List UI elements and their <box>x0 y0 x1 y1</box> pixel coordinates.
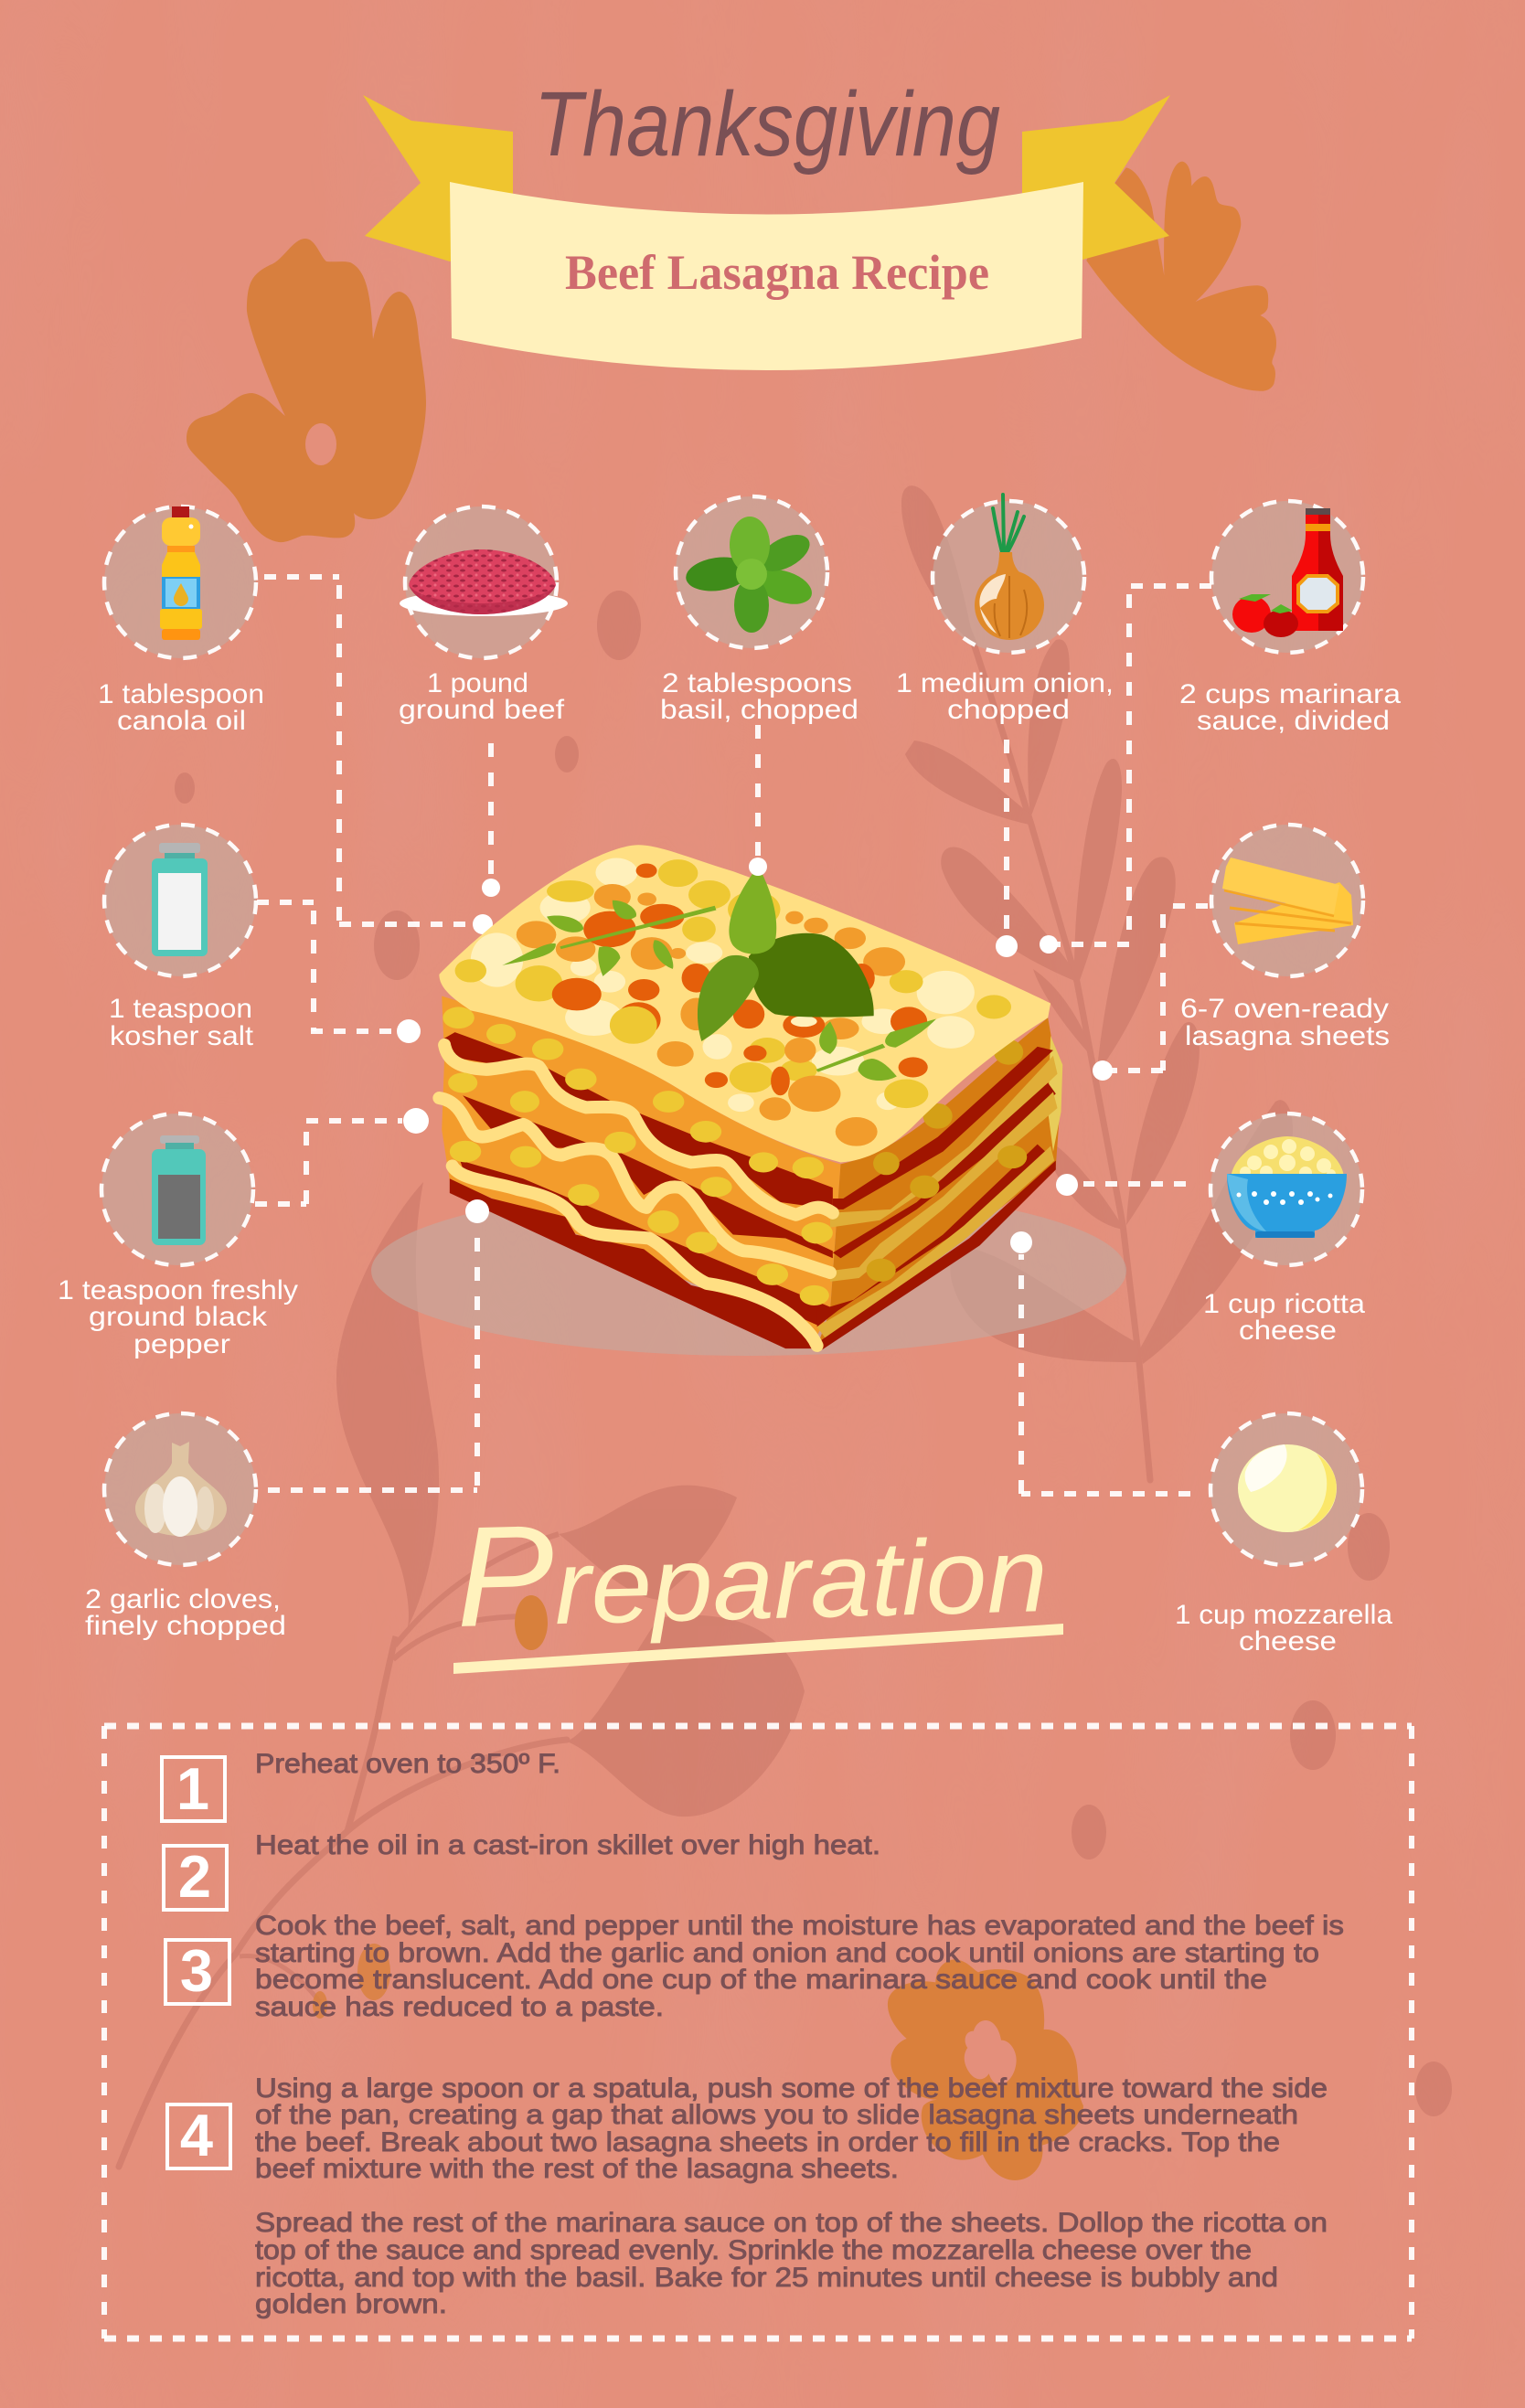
step 3 text: starting to brown. Add the garlic and onion and cook until onions are starting to <box>255 1938 1319 1968</box>
label: mozzarella <box>1175 1600 1392 1657</box>
ingredient: ricotta cheese <box>1210 1113 1362 1265</box>
label: ricotta <box>1203 1289 1365 1346</box>
label: black pepper: 1 teaspoon freshly <box>58 1275 298 1305</box>
right face <box>817 1018 1061 1347</box>
panel: preparation steps <box>104 1726 1412 2339</box>
step 4 number <box>167 2102 230 2168</box>
connector: onion <box>996 740 1018 957</box>
label: basil <box>660 668 858 725</box>
sauce bands <box>439 1032 1058 1349</box>
label: canola oil: 1 tablespoon <box>98 679 264 709</box>
pale right edge <box>1048 1036 1062 1152</box>
basil garnish <box>749 933 874 1018</box>
ingredient: basil <box>676 496 827 648</box>
ingredient: black pepper <box>101 1113 253 1265</box>
label: ricotta: cheese <box>1239 1316 1337 1346</box>
label: basil: 2 tablespoons <box>662 668 852 698</box>
step 4 text: golden brown. <box>255 2289 447 2319</box>
subtitle: Beef Lasagna Recipe: Beef Lasagna Recipe <box>565 245 989 300</box>
step 3 text: Cook the beef, salt, and pepper until the moisture has evaporated and the beef is <box>255 1911 1344 1941</box>
label: kosher salt <box>109 994 254 1051</box>
step 3 text: sauce has reduced to a paste. <box>255 1992 664 2022</box>
label: lasagna sheets: lasagna sheets <box>1185 1021 1390 1051</box>
orange dots <box>313 1595 548 2019</box>
herbs <box>502 900 936 1081</box>
step 3 number: 3 <box>180 1937 213 2004</box>
step 4 text: Using a large spoon or a spatula, push some of the beef mixture toward the side <box>255 2073 1328 2104</box>
connector: ground beef <box>482 743 500 897</box>
step 4 text: the beef. Break about two lasagna sheets in order to fill in the cracks. Top the <box>255 2127 1280 2158</box>
label: garlic: 2 garlic cloves, <box>85 1584 281 1614</box>
connector: marinara <box>1040 586 1211 954</box>
ingredient: kosher salt <box>104 825 256 976</box>
step 4 text: Spread the rest of the marinara sauce on top of the sheets. Dollop the ricotta on <box>255 2208 1328 2238</box>
step 4 text: of the pan, creating a gap that allows you to slide lasagna sheets underneath <box>255 2100 1298 2130</box>
ingredient: canola oil <box>104 506 256 658</box>
step 3 text <box>255 1911 1344 2022</box>
step 4 text <box>255 2073 1328 2319</box>
connector: mozzarella <box>1010 1231 1190 1494</box>
connector dots over lasagna <box>465 858 1078 1223</box>
label: basil: basil, chopped <box>660 695 858 725</box>
heading: Preparation: Preparation <box>453 1483 1050 1657</box>
pasta waves <box>439 1045 833 1346</box>
background plant: right <box>901 485 1293 1480</box>
step 2 number: 2 <box>178 1843 211 1910</box>
label: black pepper <box>58 1275 298 1359</box>
label: kosher salt: 1 teaspoon <box>109 994 252 1024</box>
ingredient: ground beef <box>400 506 568 658</box>
label: lasagna sheets: 6-7 oven-ready <box>1180 994 1389 1024</box>
connector: ricotta <box>1083 1181 1186 1187</box>
label: ricotta: 1 cup ricotta <box>1203 1289 1365 1319</box>
label: marinara sauce: 2 cups marinara <box>1179 679 1401 709</box>
label: onion: chopped <box>947 695 1070 725</box>
label: canola oil: canola oil <box>117 706 246 736</box>
label: garlic: finely chopped <box>85 1611 286 1641</box>
step 1 text: Preheat oven to 350º F. <box>255 1749 560 1779</box>
left face dots <box>443 1007 833 1305</box>
step 4 text: top of the sauce and spread evenly. Sprinkle the mozzarella cheese over the <box>255 2235 1252 2265</box>
label: ground beef: ground beef <box>399 695 565 725</box>
lasagna plate shadow <box>371 1186 1126 1356</box>
label: garlic <box>85 1584 286 1641</box>
step 4 number: 4 <box>180 2102 213 2168</box>
ingredient: mozzarella cheese <box>1210 1413 1362 1565</box>
title: Thanksgiving: Thanksgiving <box>534 73 1000 176</box>
step 1 number: 1 <box>176 1755 209 1822</box>
label: mozzarella: 1 cup mozzarella <box>1175 1600 1392 1630</box>
ingredient: garlic <box>104 1413 256 1565</box>
label: marinara sauce: sauce, divided <box>1197 706 1390 736</box>
step 1 number <box>162 1755 225 1822</box>
connector: black pepper <box>255 1108 429 1204</box>
label: onion: 1 medium onion, <box>896 668 1114 698</box>
step 2 text: Heat the oil in a cast-iron skillet over high heat. <box>255 1830 880 1860</box>
label: marinara sauce <box>1179 679 1401 736</box>
ribbon tails <box>363 95 1170 261</box>
connector: canola oil <box>264 577 493 934</box>
label: ground beef <box>399 668 565 725</box>
connector: garlic <box>268 1225 477 1490</box>
background blobs <box>175 591 1452 2116</box>
step 2 number <box>164 1843 227 1910</box>
flower: left <box>187 239 426 542</box>
connector: kosher salt <box>257 902 421 1043</box>
step 4 text: beef mixture with the rest of the lasagna sheets. <box>255 2154 899 2184</box>
flower: bottom <box>888 1959 1083 2180</box>
label: black pepper: ground black <box>89 1302 268 1332</box>
ribbon banner <box>450 182 1083 370</box>
background plant: left <box>119 1182 805 2167</box>
ingredient: lasagna sheets <box>1211 825 1363 976</box>
ingredient: marinara sauce <box>1211 501 1363 653</box>
step 3 text: become translucent. Add one cup of the marinara sauce and cook until the <box>255 1965 1267 1995</box>
label: onion <box>896 668 1114 725</box>
left face <box>442 996 840 1336</box>
step 3 number <box>165 1937 229 2004</box>
flower: right <box>1086 162 1276 391</box>
label: black pepper: pepper <box>133 1329 230 1359</box>
ingredient: onion <box>933 495 1084 653</box>
step 4 text: ricotta, and top with the basil. Bake for 25 minutes until cheese is bubbly and <box>255 2263 1278 2293</box>
label: canola oil <box>98 679 264 736</box>
lasagna illustration <box>439 845 1062 1349</box>
connector: lasagna sheets <box>1093 906 1208 1081</box>
connector: basil <box>755 725 761 859</box>
label: ground beef: 1 pound <box>427 668 528 698</box>
label: mozzarella: cheese <box>1239 1626 1337 1657</box>
label: lasagna sheets <box>1180 994 1390 1051</box>
label: kosher salt: kosher salt <box>110 1021 254 1051</box>
cheese top toppings <box>471 858 975 1112</box>
right face dots <box>867 1039 1027 1282</box>
cheese top <box>439 845 1050 1162</box>
